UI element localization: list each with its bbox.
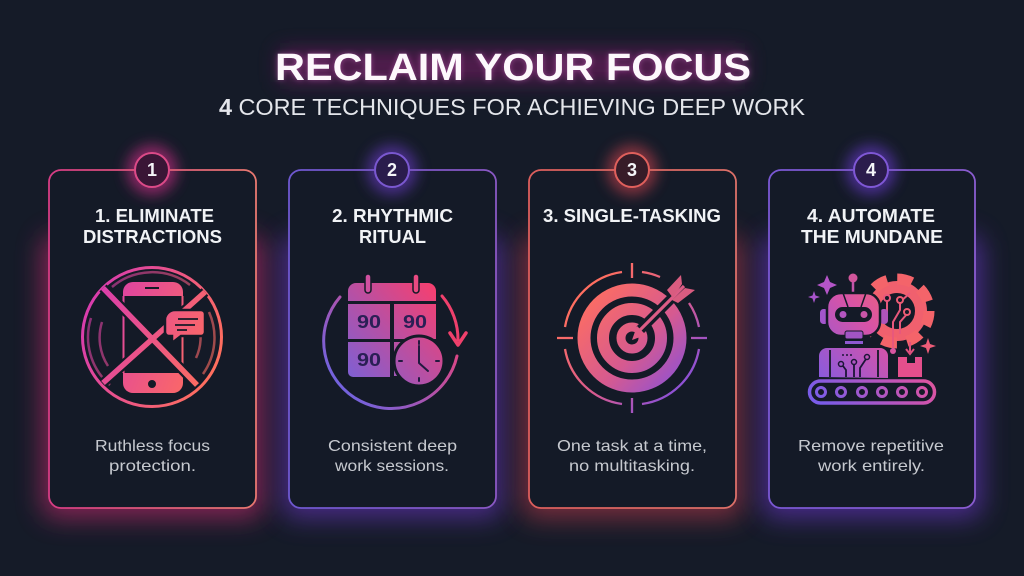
heading 3: 3. SINGLE-TASKING [543,206,721,226]
heading 1: DISTRACTIONS [83,227,222,247]
description 1 [95,438,210,475]
icon: target with arrow [557,263,707,413]
number badge 1 [135,153,169,187]
icon: calendar with clock and cycle arrow: 90 [357,350,381,370]
icon: calendar with clock and cycle arrow [324,274,466,409]
panel: single-tasking [522,145,742,518]
icon: robot, gear and conveyor [808,274,936,403]
number badge 2: 2 [387,160,397,180]
icon: calendar with clock and cycle arrow: 90 [403,312,427,332]
description 3: One task at a time, [557,438,707,455]
number badge 1: 1 [147,160,157,180]
subtitle: 4 CORE TECHNIQUES FOR ACHIEVING DEEP WORK [219,94,806,120]
description 1: Ruthless focus [95,438,210,455]
panel: automate the mundane [762,145,982,518]
header: title and subtitle: RECLAIM YOUR FOCUS [275,47,751,89]
description 3 [557,438,707,475]
number badge 3: 3 [627,160,637,180]
description 2 [328,438,457,475]
heading 4: THE MUNDANE [801,227,943,247]
heading 2: 2. RHYTHMIC [332,206,453,226]
description 4 [798,438,944,475]
description 1: protection. [109,458,196,475]
description 4: Remove repetitive [798,438,944,455]
description 4: work entirely. [817,458,925,475]
panel: rhythmic ritual [282,145,502,518]
title: RECLAIM YOUR FOCUS [275,47,751,89]
heading 2: RITUAL [359,227,426,247]
header: title and subtitle [219,47,806,120]
description 2: Consistent deep [328,438,457,455]
number badge 4: 4 [866,160,876,180]
description 3: no multitasking. [569,458,695,475]
description 2: work sessions. [334,458,449,475]
heading 1: 1. ELIMINATE [95,206,214,226]
heading 4 [801,206,943,247]
number badge 2 [375,153,409,187]
icon: calendar with clock and cycle arrow: 90 [357,312,381,332]
heading 1 [83,206,222,247]
heading 2 [332,206,453,247]
heading 4: 4. AUTOMATE [807,206,935,226]
number badge 4 [854,153,888,187]
panel: eliminate distractions [42,145,263,518]
number badge 3 [615,153,649,187]
icon: crossed-out phone [82,268,222,406]
